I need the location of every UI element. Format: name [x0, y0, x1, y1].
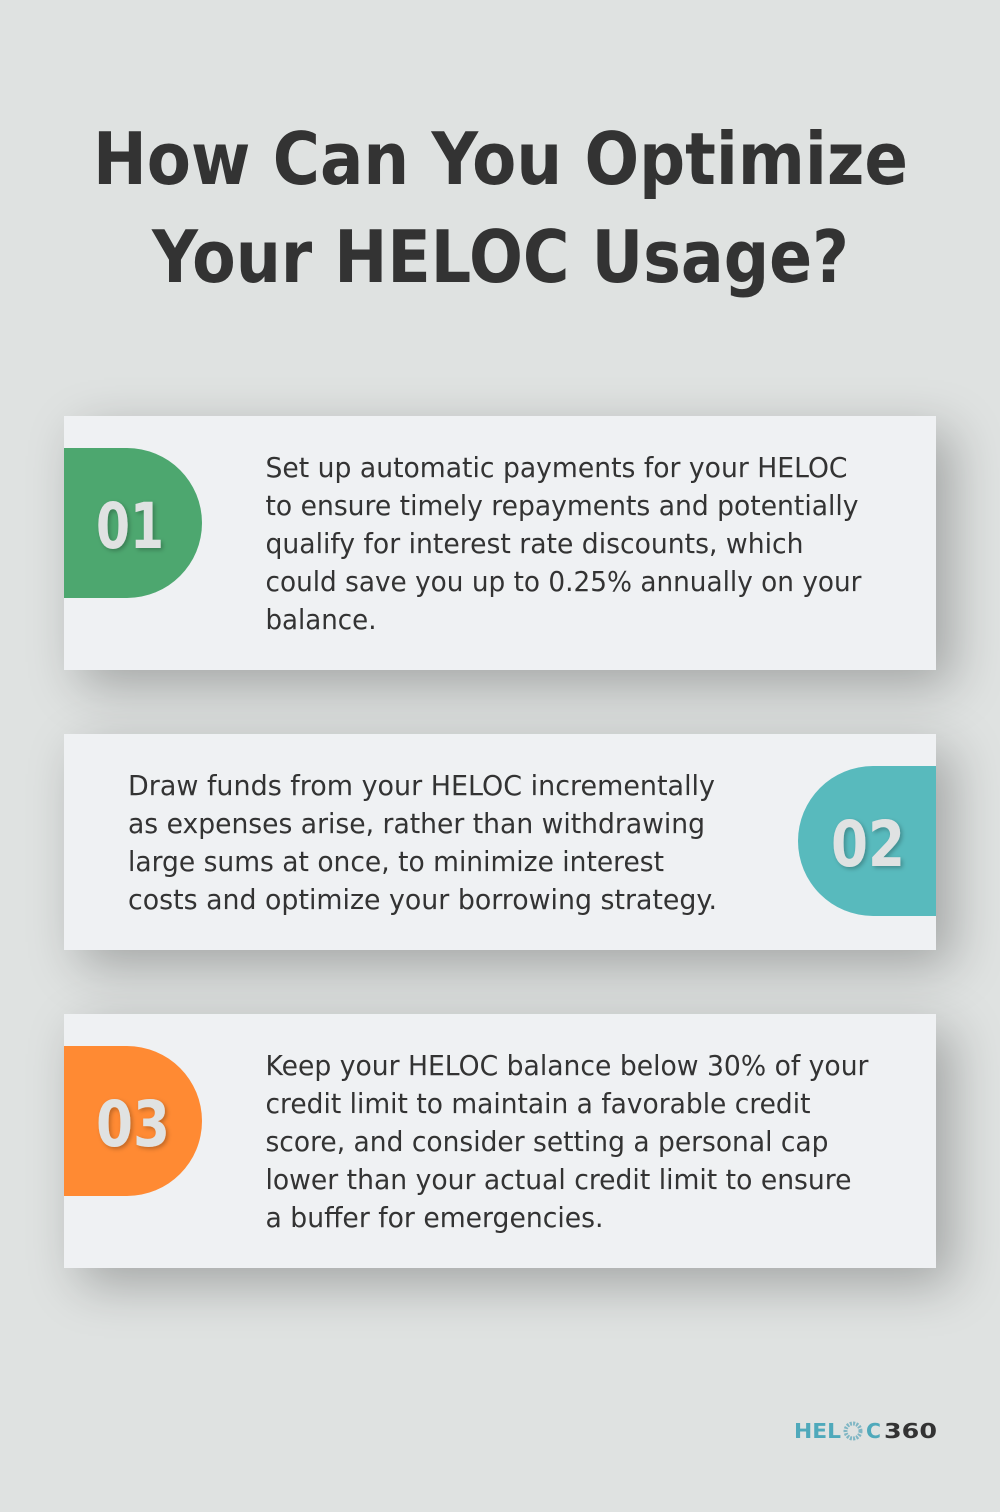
step 01 text: Set up automatic payments for your HELOC	[266, 451, 848, 484]
step 03 badge: 03	[96, 1088, 170, 1161]
step 02 text: Draw funds from your HELOC incrementally	[128, 769, 715, 802]
step 03 text	[266, 1049, 869, 1234]
step 01 badge: 01	[96, 490, 164, 563]
title: How Can You Optimize	[93, 117, 908, 201]
logo: HELOC360: HEL	[794, 1419, 841, 1443]
step 03 text: Keep your HELOC balance below 30% of your	[266, 1049, 869, 1082]
title: Your HELOC Usage?	[151, 215, 849, 299]
step 01 text: could save you up to 0.25% annually on your	[266, 565, 862, 598]
step 02 badge	[798, 766, 936, 916]
step 01 text	[266, 451, 862, 636]
step 02 badge: 02	[831, 808, 905, 881]
title	[93, 117, 908, 299]
step 02 text: large sums at once, to minimize interest	[128, 845, 664, 878]
panel: card 2 background	[64, 734, 936, 950]
step 02 text: as expenses arise, rather than withdrawing	[128, 807, 705, 840]
logo: HELOC360	[794, 1419, 937, 1443]
logo: HELOC360: C	[866, 1419, 881, 1443]
step 01 text: balance.	[266, 603, 376, 636]
step 03 badge	[64, 1046, 202, 1196]
step 03 text: credit limit to maintain a favorable credit	[266, 1087, 811, 1120]
panel: card 3 background	[64, 1014, 936, 1268]
step 01 text: to ensure timely repayments and potentially	[266, 489, 858, 522]
step 01 text: qualify for interest rate discounts, which	[266, 527, 804, 560]
step 03 text: a buffer for emergencies.	[266, 1201, 604, 1234]
panel: card 1 background	[64, 416, 936, 670]
logo: HELOC360: 360	[884, 1419, 937, 1443]
step 03 text: score, and consider setting a personal cap	[266, 1125, 828, 1158]
step 03 text: lower than your actual credit limit to ensure	[266, 1163, 852, 1196]
step 02 text	[128, 769, 717, 916]
step 01 badge	[64, 448, 202, 598]
step 02 text: costs and optimize your borrowing strategy.	[128, 883, 717, 916]
